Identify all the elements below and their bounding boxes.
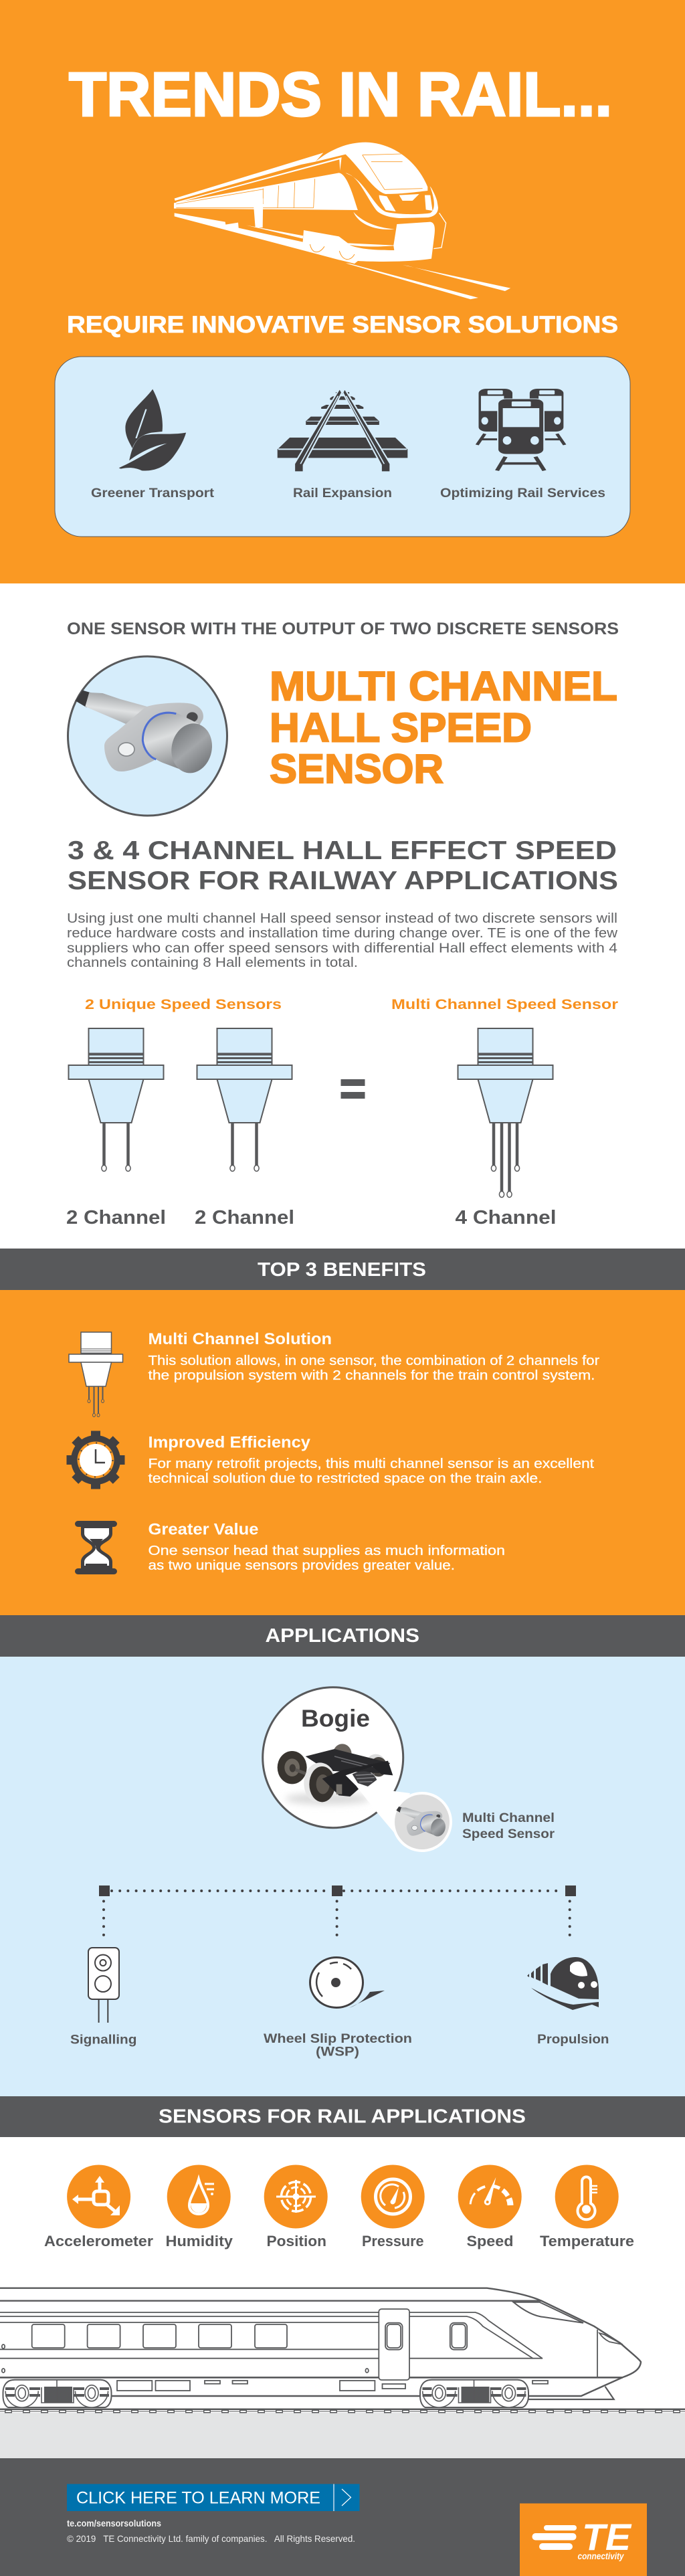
text block: multi channel solution: the propulsion system with 2 channels for the train control system. [149, 1368, 595, 1383]
label: 2 channel left: 2 Channel [66, 1207, 166, 1228]
icon: high speed train illustration [174, 143, 510, 299]
text block: improved efficiency: For many retrofit projects, this multi channel sensor is an excellent [149, 1457, 594, 1471]
icon: position [264, 2165, 328, 2228]
panel: header background [0, 0, 685, 583]
icon: leaves [119, 389, 186, 471]
icon: gear clock [67, 1431, 124, 1489]
heading: 3 and 4 channel [68, 836, 618, 895]
text block: multi channel solution: Multi Channel Solution [149, 1330, 332, 1348]
text block: description [67, 911, 618, 970]
icon: chevron [342, 2489, 351, 2506]
illustration: side view train [0, 2288, 641, 2399]
text block: improved efficiency: technical solution due to restricted space on the train axle. [149, 1471, 542, 1486]
text block: description: channels containing 8 Hall elements in total. [67, 955, 358, 970]
icon: humidity [167, 2165, 231, 2228]
label: multi channel speed sensor callout [462, 1811, 555, 1841]
panel: footer [0, 2458, 685, 2576]
label: greener transport: Greener Transport [91, 486, 215, 500]
illustration: bogie two [420, 2380, 528, 2407]
icon: rail track [278, 389, 407, 472]
heading: multi channel hall speed sensor: HALL SPEED [270, 705, 532, 751]
icon: train propulsion [527, 1957, 599, 2010]
panel: sensors background [0, 2137, 685, 2413]
text block: greater value: Greater Value [149, 1520, 258, 1539]
title: TRENDS IN RAIL... [69, 60, 612, 129]
labels: sensor types: Pressure [362, 2233, 424, 2249]
label: 2 unique speed sensors: 2 Unique Speed Sensors [85, 997, 282, 1012]
labels: sensor types [44, 2233, 634, 2249]
panel: sensors for rail bar [0, 2096, 685, 2137]
panel: top 3 benefits bar [0, 1249, 685, 1290]
button: click here to learn more [67, 2484, 360, 2511]
labels: sensor types: Position [266, 2233, 326, 2249]
label: multi channel speed sensor callout: Multi Channel [462, 1811, 555, 1825]
icon: three trains [477, 389, 565, 470]
icon: equals sign [341, 1079, 365, 1099]
icon: wheel slip [310, 1958, 385, 2008]
heading: multi channel hall speed sensor [270, 664, 617, 792]
label: multi channel speed sensor callout: Speed Sensor [462, 1827, 555, 1841]
subtitle: REQUIRE INNOVATIVE SENSOR SOLUTIONS [67, 312, 618, 338]
diagram: first 2 channel sensor [68, 1028, 163, 1171]
image: bogie [278, 1744, 393, 1805]
heading: applications: APPLICATIONS [265, 1625, 419, 1647]
heading: 3 and 4 channel: SENSOR FOR RAILWAY APPLICATIONS [68, 866, 618, 895]
text block: description: reduce hardware costs and installation time during change over. TE is one of the few [67, 926, 618, 941]
panel: white sensor section background [0, 583, 685, 1249]
text block: greater value: as two unique sensors provides greater value. [149, 1558, 455, 1573]
ground band [0, 2413, 685, 2458]
diagram: 4 channel sensor [458, 1028, 553, 1198]
label: 2 channel middle: 2 Channel [195, 1207, 294, 1228]
label: wheel slip protection: (WSP) [316, 2045, 359, 2059]
panel: applications bar [0, 1615, 685, 1657]
label: optimizing rail services: Optimizing Rail Services [440, 486, 605, 500]
panel: benefits background [0, 1290, 685, 1615]
image: multi channel sensor in circle [68, 656, 227, 816]
image: bogie circle [263, 1687, 452, 1852]
heading: top 3 benefits: TOP 3 BENEFITS [258, 1259, 426, 1281]
icon: white sensor [69, 1332, 123, 1417]
text block: multi channel solution: This solution allows, in one sensor, the combination of 2 channels for [149, 1354, 599, 1368]
label: 4 channel: 4 Channel [455, 1207, 557, 1228]
label: wheel slip protection [264, 2032, 412, 2059]
illustration: bogie one [3, 2380, 111, 2407]
label: propulsion: Propulsion [537, 2033, 609, 2047]
label: bogie: Bogie [301, 1705, 370, 1732]
icon: signal [88, 1948, 119, 2023]
callout: sensor close-up [392, 1792, 452, 1852]
label: multi channel speed sensor: Multi Channel Speed Sensor [391, 997, 618, 1012]
label: signalling: Signalling [70, 2033, 136, 2047]
text: copyright: © 2019 TE Connectivity Ltd. family of companies. All Rights Reserved. [67, 2533, 355, 2544]
icon: hourglass [75, 1521, 117, 1574]
panel: applications background [0, 1657, 685, 2096]
labels: sensor types: Accelerometer [44, 2233, 153, 2249]
callout wedge [357, 1786, 410, 1833]
icon: pressure [361, 2165, 425, 2228]
labels: sensor types: Humidity [166, 2233, 233, 2249]
icon: accelerometer [67, 2165, 130, 2228]
diagram: second 2 channel sensor [197, 1028, 292, 1171]
text block: description: Using just one multi channel Hall speed sensor instead of two discrete sensors will [67, 911, 617, 926]
text block: greater value: One sensor head that supplies as much information [149, 1544, 505, 1558]
text block: greater value [149, 1520, 505, 1573]
icon: temperature [555, 2165, 619, 2228]
labels: sensor types: Temperature [540, 2233, 634, 2249]
heading: multi channel hall speed sensor: MULTI CHANNEL [270, 664, 617, 709]
logo: TE connectivity [520, 2504, 647, 2576]
text: website: te.com/sensorsolutions [67, 2518, 161, 2528]
label: rail expansion: Rail Expansion [293, 486, 392, 500]
labels: sensor types: Speed [467, 2233, 514, 2249]
label: wheel slip protection: Wheel Slip Protection [264, 2032, 412, 2046]
text block: description: suppliers who can offer speed sensors with differential Hall effect elements with 4 [67, 941, 617, 955]
panel: three trends [55, 357, 630, 537]
text block: multi channel solution [149, 1330, 599, 1383]
logo: TE connectivity: connectivity [578, 2551, 625, 2561]
heading: sensors for rail applications: SENSORS FOR RAIL APPLICATIONS [159, 2106, 526, 2128]
text block: improved efficiency: Improved Efficiency [149, 1433, 311, 1452]
heading: multi channel hall speed sensor: SENSOR [270, 746, 444, 792]
button: click here to learn more: CLICK HERE TO LEARN MORE [76, 2489, 320, 2508]
logo: TE connectivity: TE [582, 2516, 632, 2558]
illustration: track [0, 2409, 685, 2411]
text block: improved efficiency [149, 1433, 594, 1486]
icon: speed gauge [458, 2165, 522, 2228]
heading: 3 and 4 channel: 3 & 4 CHANNEL HALL EFFECT SPEED [68, 836, 617, 865]
heading: one sensor: ONE SENSOR WITH THE OUTPUT OF TWO DISCRETE SENSORS [67, 620, 619, 638]
diagram: dotted connectors [99, 1885, 576, 1936]
